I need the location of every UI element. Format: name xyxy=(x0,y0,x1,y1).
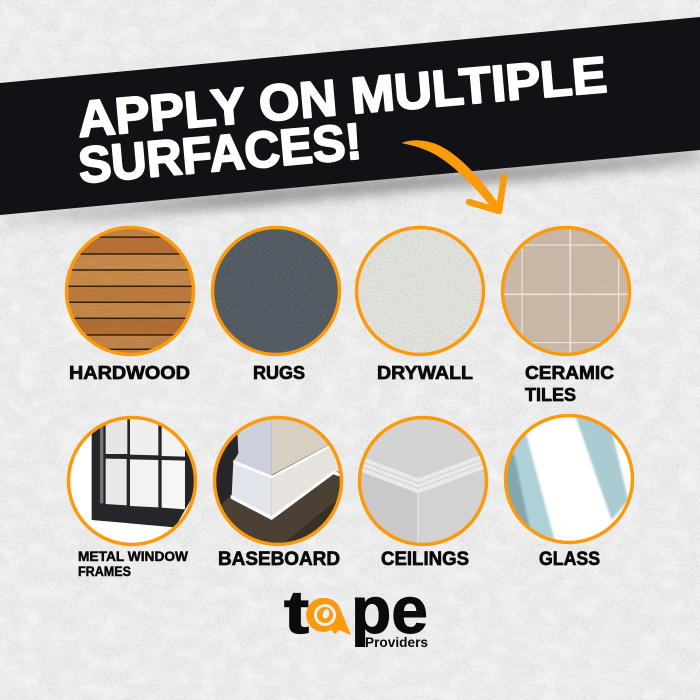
image: black window xyxy=(67,416,197,546)
ring xyxy=(214,418,342,544)
arrow xyxy=(403,141,504,211)
ring xyxy=(66,228,194,354)
image: glass reflections xyxy=(507,417,631,541)
logo letters pe: pe xyxy=(351,573,428,647)
image: woven fabric xyxy=(211,226,341,356)
logo word Providers: Providers xyxy=(365,635,428,650)
ring xyxy=(212,228,340,354)
label: CERAMIC xyxy=(525,363,614,383)
title: APPLY ON MULTIPLE xyxy=(75,46,609,148)
label: RUGS xyxy=(253,363,305,383)
panel: ceilings xyxy=(357,415,490,570)
ring xyxy=(356,228,484,354)
ring xyxy=(68,418,196,544)
label: HARDWOOD xyxy=(69,363,190,383)
logo tape roll xyxy=(306,598,351,635)
image: drywall texture xyxy=(355,226,485,356)
label: GLASS xyxy=(539,549,600,570)
image: beige tiles xyxy=(501,226,631,356)
ring xyxy=(360,418,486,544)
label line 2: FRAMES xyxy=(78,564,131,579)
label: BASEBOARD xyxy=(218,548,340,570)
ring xyxy=(502,228,630,354)
ring xyxy=(506,416,632,542)
image: wood planks xyxy=(65,226,195,356)
title xyxy=(75,46,609,194)
image: baseboard corner xyxy=(216,419,340,543)
panel: ceramic tiles xyxy=(501,226,631,405)
panel: drywall xyxy=(355,226,485,383)
label: CEILINGS xyxy=(381,549,469,570)
logo xyxy=(284,573,428,650)
label line 2: TILES xyxy=(525,385,576,405)
panel: hardwood xyxy=(65,226,195,383)
logo letter t: t xyxy=(284,579,309,646)
label: DRYWALL xyxy=(377,363,473,383)
black diagonal banner xyxy=(0,17,700,227)
image: crown molding xyxy=(361,419,485,543)
panel: metal window frames xyxy=(67,416,197,579)
title: SURFACES! xyxy=(76,112,364,194)
panel: glass xyxy=(504,414,634,566)
label: METAL WINDOW xyxy=(78,549,188,564)
panel: rugs xyxy=(211,226,341,383)
panel: baseboard xyxy=(212,415,345,570)
